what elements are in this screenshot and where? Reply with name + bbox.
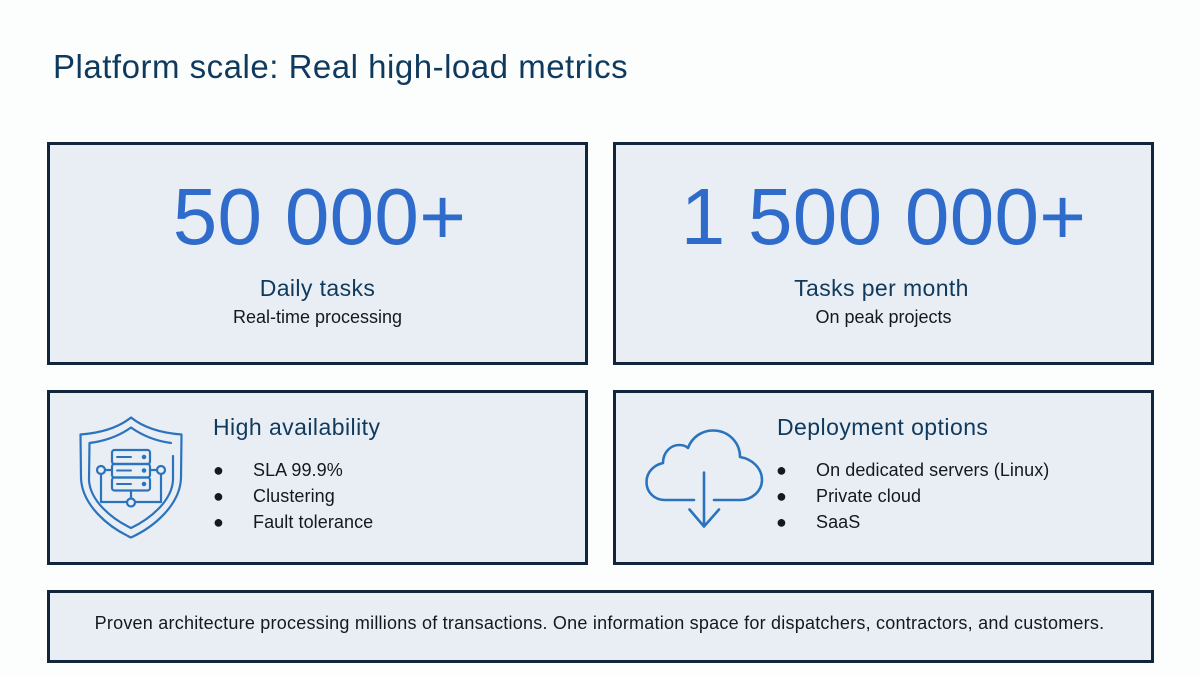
panel: high availability: ● <box>213 460 224 480</box>
icon: shield with server <box>79 416 183 539</box>
text: summary: Proven architecture processing millions of transactions. One information space for dispatchers, contractors, and customers. <box>95 613 1104 633</box>
number: tasks per month: 1 500 000+ <box>681 172 1086 261</box>
panel: summary banner <box>47 590 1154 663</box>
panel: high availability <box>47 390 588 565</box>
panel: deployment options: ● <box>776 486 787 506</box>
number: daily tasks: 50 000+ <box>173 172 466 261</box>
list: deployment options <box>776 460 1049 532</box>
text: on peak projects: On peak projects <box>815 307 952 327</box>
panel: high availability: ● <box>213 512 224 532</box>
icon: cloud download <box>645 429 764 528</box>
title: Platform scale: Real high-load metrics <box>53 48 628 85</box>
list: high availability: SLA 99.9% <box>253 460 343 480</box>
panel: high availability: ● <box>213 486 224 506</box>
list: high availability: Clustering <box>253 486 335 506</box>
list: deployment options: On dedicated servers (Linux) <box>816 460 1049 480</box>
list: high availability <box>213 460 373 532</box>
panel: deployment options: ● <box>776 512 787 532</box>
panel: daily tasks <box>47 142 588 365</box>
label: tasks per month: Tasks per month <box>794 275 969 301</box>
list: deployment options: SaaS <box>816 512 860 532</box>
panel: tasks per month <box>613 142 1154 365</box>
text: real-time processing: Real-time processing <box>233 307 402 327</box>
list: high availability: Fault tolerance <box>253 512 373 532</box>
label: daily tasks: Daily tasks <box>260 275 375 301</box>
heading: deployment options: Deployment options <box>777 414 988 440</box>
panel: deployment options <box>613 390 1154 565</box>
list: deployment options: Private cloud <box>816 486 921 506</box>
panel: deployment options: ● <box>776 460 787 480</box>
heading: high availability: High availability <box>213 414 380 440</box>
